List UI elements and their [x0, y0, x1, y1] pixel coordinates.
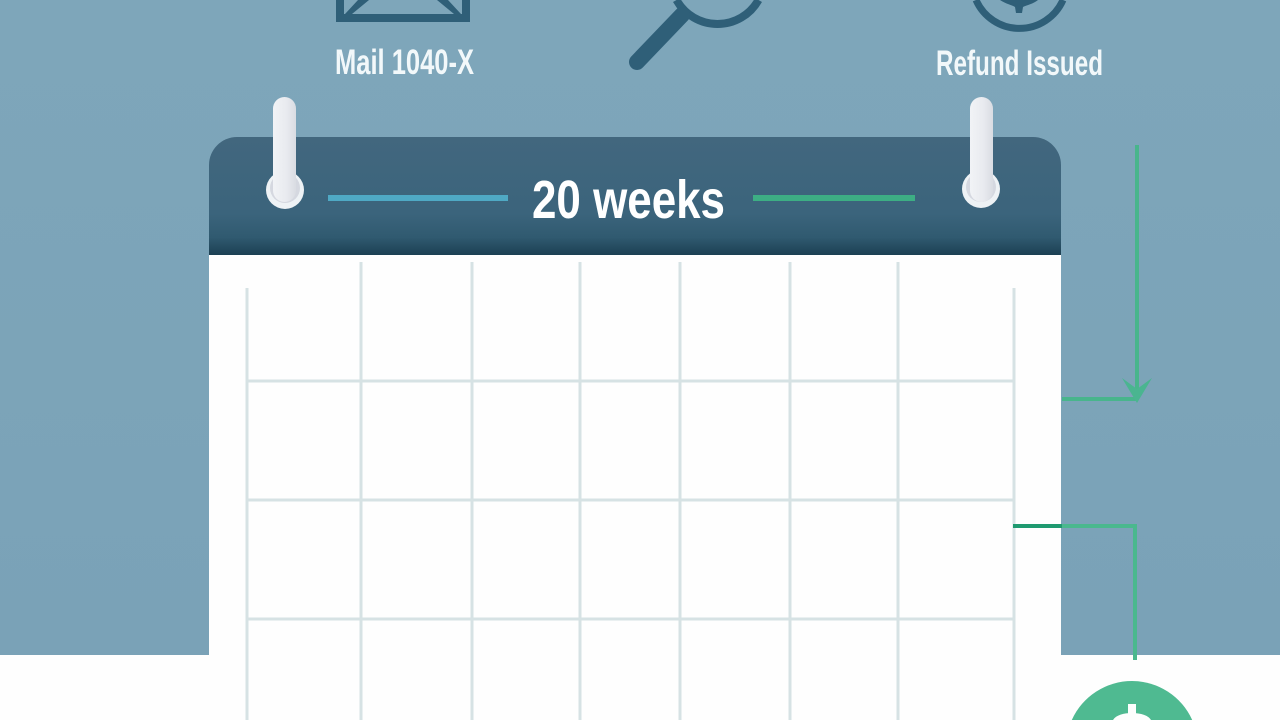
icon: magnifying glass [637, 0, 758, 62]
binder ring: left [266, 97, 304, 209]
white floor band [0, 655, 1280, 720]
header line: green [753, 195, 915, 201]
calendar header [209, 137, 1061, 255]
icon: refund coin [976, 0, 1063, 28]
calendar grid [247, 262, 1014, 720]
connector: calendar to refund circle [1013, 526, 1135, 660]
label: Refund Issued: Refund Issued [936, 44, 1103, 83]
calendar [209, 97, 1061, 720]
icon: green refund badge [1072, 681, 1192, 720]
icon: envelope [336, 0, 470, 22]
header line: blue [328, 195, 508, 201]
calendar body [209, 250, 1061, 720]
heading: 20 weeks: 20 weeks [532, 170, 725, 230]
arrow: down to calendar row [1062, 145, 1152, 403]
label: Mail 1040-X: Mail 1040-X [335, 43, 474, 82]
binder ring: right [962, 97, 1000, 208]
